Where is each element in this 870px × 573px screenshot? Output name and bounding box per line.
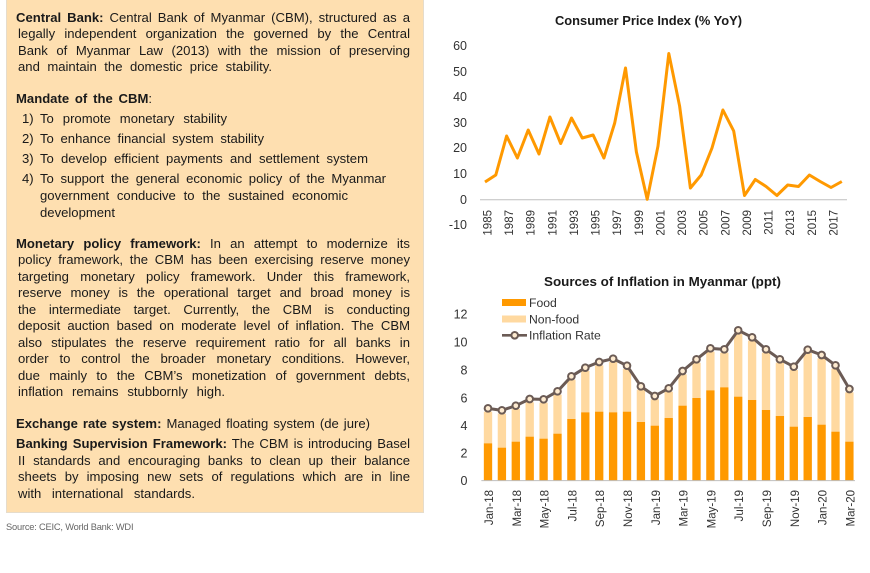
panel: central bank of Myanmar overview: government conducive to the sustained economic — [40, 188, 348, 203]
panel: central bank of Myanmar overview: To enhance financial system stability — [40, 131, 264, 146]
food bars — [484, 387, 854, 481]
y axis labels: 12 — [454, 308, 468, 322]
y axis labels: 10 — [453, 167, 467, 181]
x axis labels: 1997 — [612, 210, 624, 236]
x axis labels: Sep-19 — [762, 490, 774, 527]
x axis labels: 1989 — [526, 210, 538, 236]
x axis labels: 2007 — [720, 210, 732, 236]
y axis labels: 2 — [461, 446, 468, 460]
panel: central bank of Myanmar overview: To develop efficient payments and settlement system — [40, 151, 368, 166]
panel: central bank of Myanmar overview: legally independent organization the governed by the Central — [18, 26, 410, 41]
legend: Non-food — [529, 312, 579, 326]
y axis labels: 4 — [461, 419, 468, 433]
x axis labels: 1985 — [482, 210, 494, 236]
panel: central bank of Myanmar overview: Central Bank: Central Bank of Myanmar (CBM), structured as a — [16, 10, 410, 25]
panel: central bank of Myanmar overview: inflation remains stubbornly high. — [18, 384, 225, 399]
x axis labels: 1999 — [634, 210, 646, 236]
panel: central bank of Myanmar overview: Banking Supervision Framework: The CBM is introducing Basel — [16, 436, 410, 451]
y axis labels: 0 — [461, 474, 468, 488]
x axis labels — [482, 210, 840, 236]
panel: central bank of Myanmar overview: policy framework, the CBM has been exercising reserve money — [18, 252, 410, 267]
x axis labels: 2015 — [807, 210, 819, 236]
panel: central bank of Myanmar overview: 1) — [22, 111, 34, 126]
panel: central bank of Myanmar overview: 3) — [22, 151, 34, 166]
panel: central bank of Myanmar overview: To support the general economic policy of the Myanmar — [40, 171, 386, 186]
non-food bars — [484, 334, 854, 448]
y axis labels: 30 — [453, 116, 467, 130]
CPI line — [485, 54, 842, 199]
x axis labels: 2005 — [699, 210, 711, 236]
stacked bars: marks in 3x coordinates — [481, 327, 855, 481]
y axis labels — [454, 308, 468, 488]
panel: central bank of Myanmar overview: and maintain the domestic price stability. — [18, 59, 272, 74]
chart: sources of inflation — [454, 274, 857, 528]
x axis labels: 2017 — [828, 210, 840, 236]
chart: consumer price index — [449, 13, 847, 236]
x axis labels: Nov-19 — [790, 490, 802, 527]
legend: Food — [529, 296, 557, 310]
x axis labels: May-18 — [540, 490, 552, 528]
legend: Inflation Rate — [529, 328, 601, 342]
x axis labels: Jul-18 — [567, 490, 579, 521]
panel: central bank of Myanmar overview: reserve money is the operational target and broad money is — [18, 285, 410, 300]
panel: central bank of Myanmar overview: the intermediate target. Currently, the CBM is conducting — [18, 302, 410, 317]
y axis labels: 0 — [460, 193, 467, 207]
y axis labels: 6 — [461, 392, 468, 406]
panel: central bank of Myanmar overview: with international standards. — [18, 486, 195, 501]
heading: mandate of the CBM: Mandate of the CBM: — [16, 91, 152, 106]
x axis labels: Mar-18 — [512, 490, 524, 526]
y axis labels: 60 — [453, 39, 467, 53]
chart title: Consumer Price Index (% YoY) — [555, 13, 742, 28]
panel: central bank of Myanmar overview: II standards and encouraging banks to clean up their balance — [18, 453, 410, 468]
source note: Source: CEIC, World Bank: WDI — [6, 522, 133, 532]
x axis labels: 1995 — [591, 210, 603, 236]
x axis labels: Jan-18 — [484, 490, 496, 525]
y axis labels: 10 — [454, 336, 468, 350]
x axis labels: Jan-20 — [818, 490, 830, 525]
x axis labels: Sep-18 — [595, 490, 607, 527]
panel: central bank of Myanmar overview: To promote monetary stability — [40, 111, 227, 126]
panel: central bank of Myanmar overview: due mainly to the CBM’s monetization of government debts, — [18, 368, 410, 383]
text block: exchange rate system: Exchange rate system: Managed floating system (de jure) — [16, 416, 370, 431]
panel: central bank of Myanmar overview: Bank of Myanmar Law (2013) with the mission of preserving — [18, 43, 410, 58]
x axis labels — [484, 490, 857, 528]
x axis labels: May-19 — [706, 490, 718, 528]
x axis labels: 2009 — [742, 210, 754, 236]
x axis labels: Mar-20 — [845, 490, 857, 526]
legend — [502, 296, 601, 342]
panel: central bank of Myanmar overview: sheets by imposing new sets of regulations which are in line — [18, 469, 410, 484]
x axis labels: Mar-19 — [679, 490, 691, 526]
panel: central bank of Myanmar overview: 4) — [22, 171, 34, 186]
panel: central bank of Myanmar overview: development — [40, 205, 115, 220]
y axis labels: -10 — [449, 218, 467, 232]
x axis labels: 1987 — [504, 210, 516, 236]
x axis labels: Nov-18 — [623, 490, 635, 527]
y axis labels: 20 — [453, 141, 467, 155]
panel: central bank of Myanmar overview — [6, 0, 424, 513]
panel: central bank of Myanmar overview: 2) — [22, 131, 34, 146]
y axis labels: 40 — [453, 90, 467, 104]
x axis labels: 2003 — [677, 210, 689, 236]
x axis labels: 2011 — [764, 210, 776, 235]
x axis labels: 2001 — [656, 210, 668, 236]
panel: central bank of Myanmar overview: order to control the broader monetary conditions. However, — [18, 351, 410, 366]
y axis labels — [449, 39, 467, 232]
panel: central bank of Myanmar overview: deposit auction based on moderate level of inflation. The CBM — [18, 318, 410, 333]
x axis labels: 1993 — [569, 210, 581, 236]
y axis labels: 50 — [453, 65, 467, 79]
panel: central bank of Myanmar overview: also stipulates the reserve requirement ratio for all banks in — [18, 335, 410, 350]
chart title: Sources of Inflation in Myanmar (ppt) — [544, 274, 781, 289]
inflation rate line — [485, 327, 853, 414]
x axis labels: Jul-19 — [734, 490, 746, 521]
y axis labels: 8 — [461, 364, 468, 378]
x axis labels: 1991 — [547, 210, 559, 236]
x axis labels: Jan-19 — [651, 490, 663, 525]
panel: central bank of Myanmar overview: targeting monetary policy framework. Under this framework, — [18, 269, 410, 284]
x axis labels: 2013 — [785, 210, 797, 236]
panel: central bank of Myanmar overview: Monetary policy framework: In an attempt to modernize its — [16, 236, 410, 251]
